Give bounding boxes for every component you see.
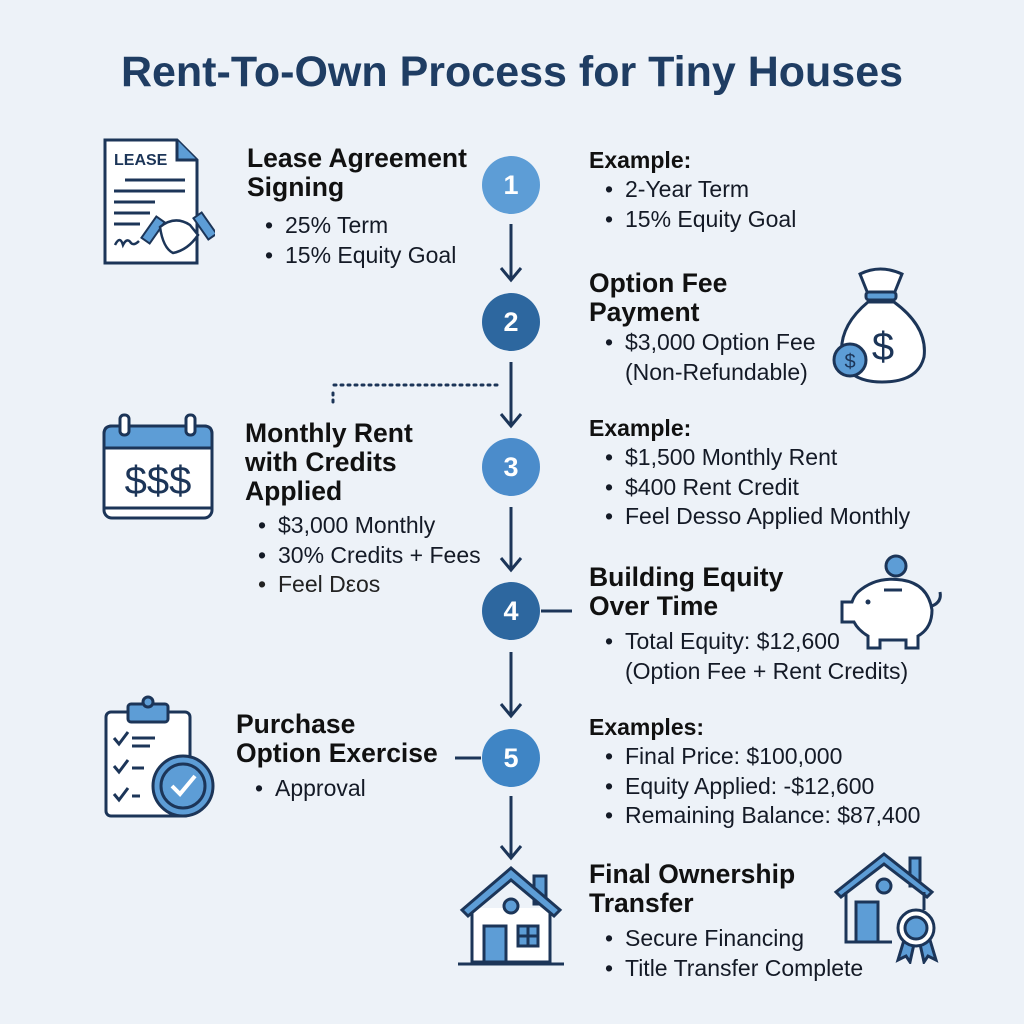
icon: piggy bank: [840, 554, 942, 650]
example 5: Final Price: $100,000: [625, 743, 842, 769]
text: Approval: [275, 775, 366, 801]
icon: money bag: $: [872, 325, 894, 369]
icon: lease document: LEASE: [114, 152, 168, 169]
step 1 text: Lease Agreement: [247, 143, 467, 173]
text: 25% Term: [285, 212, 388, 238]
step 6 text: Transfer: [589, 888, 694, 918]
example 1: 15% Equity Goal: [625, 206, 796, 232]
title: Rent-To-Own Process for Tiny Houses: [121, 48, 903, 96]
text: $3,000 Monthly: [278, 512, 435, 538]
step 4 text: Total Equity: $12,600: [625, 628, 840, 654]
icon: lease document: [104, 138, 215, 264]
example 1: 2-Year Term: [625, 176, 749, 202]
example 1: Example:: [589, 147, 691, 173]
step 2 text: Option Fee: [589, 268, 727, 298]
text: 30% Credits + Fees: [278, 542, 481, 568]
step 3 text: with Credits: [245, 447, 397, 477]
example 1: [589, 147, 796, 232]
icon: house with award: [834, 852, 938, 964]
step 2 text: [589, 268, 816, 385]
text: 2: [503, 307, 519, 337]
example 3: $400 Rent Credit: [625, 474, 799, 500]
text: 5: [503, 743, 519, 773]
text: 15% Equity Goal: [285, 242, 456, 268]
icon: money bag: $: [844, 351, 856, 373]
step 4 text: [589, 562, 908, 684]
step 2 text: $3,000 Option Fee: [625, 329, 816, 355]
step 5 text: Option Exercise: [236, 738, 438, 768]
icon: house: [458, 866, 564, 966]
step 2 text: (Non-Refundable): [625, 358, 808, 384]
example 3: Example:: [589, 415, 691, 441]
example 5: Examples:: [589, 714, 704, 740]
icon: clipboard: [104, 696, 214, 818]
icon: money bag: [832, 268, 926, 384]
example 5: Equity Applied: -$12,600: [625, 772, 874, 798]
step 3 text: Applied: [245, 476, 342, 506]
step 1 text: [247, 143, 467, 202]
example 3: [589, 415, 910, 529]
step 6 text: Title Transfer Complete: [625, 954, 863, 980]
step 6 text: Secure Financing: [625, 925, 804, 951]
example 5: [589, 714, 920, 828]
step 4 text: (Option Fee + Rent Credits): [625, 658, 908, 684]
text: Feel Dεos: [278, 571, 380, 597]
example 5: Remaining Balance: $87,400: [625, 802, 920, 828]
step 5 text: [236, 709, 438, 768]
example 3: $1,500 Monthly Rent: [625, 444, 837, 470]
step 2 text: Payment: [589, 297, 699, 327]
step 5 text: Purchase: [236, 709, 355, 739]
step circles: 1: [503, 170, 519, 200]
step 6 text: Final Ownership: [589, 859, 795, 889]
step 1 text: Signing: [247, 172, 344, 202]
step 4 text: Building Equity: [589, 562, 783, 592]
text: 3: [503, 452, 519, 482]
step 3 text: Monthly Rent: [245, 418, 413, 448]
step 6 text: [589, 859, 863, 981]
example 3: Feel Desso Applied Monthly: [625, 503, 910, 529]
step 3 text: [244, 418, 413, 506]
icon: calendar: [102, 414, 214, 520]
icon: calendar: $$$: [125, 459, 191, 503]
step 4 text: Over Time: [589, 591, 718, 621]
step circles: [482, 156, 540, 214]
text: 4: [503, 596, 519, 626]
